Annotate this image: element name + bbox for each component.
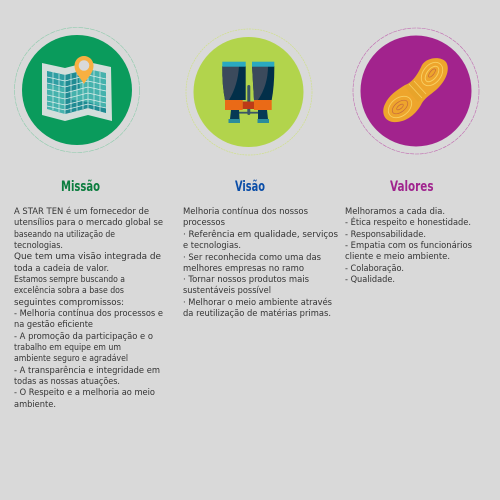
heading: Valores: Valores [390,179,434,195]
text block: Missão description: tecnologias. [14,240,63,250]
text block: Valores description: - Ética respeito e honestidade. [345,216,471,227]
text block: Valores description: - Responsabilidade. [345,229,426,239]
text block: Missão description: excelência sobra a base dos [14,285,124,295]
text block: Valores description: - Colaboração. [345,263,404,273]
panel: Valores [345,28,479,284]
text block: Valores description: cliente e meio ambiente. [345,251,450,261]
text block: Missão description: ambiente seguro e agradável [14,353,128,363]
text block: Missão description: - O Respeito e a melhoria ao meio [14,387,155,397]
text block: Visão description: melhores empresas no ramo [183,263,304,273]
panel: Visão [183,29,338,318]
icon: coiled rope on purple disc [353,28,479,154]
text block: Missão description: A STAR TEN é um fornecedor de [14,206,149,216]
text block: Missão description: trabalho em equipe em um [14,342,121,352]
text block: Missão description: utensílios para o mercado global se [14,217,163,227]
text block: Visão description: da reutilização de matérias primas. [183,308,331,318]
heading: Missão: Missão [61,179,100,195]
text block: Missão description: - A transparência e integridade em [14,365,160,375]
icon: binoculars on lime disc [186,29,312,155]
heading: Visão: Visão [235,179,265,195]
text block: Visão description [183,206,338,318]
text block: Missão description: na gestão eficiente [14,319,93,329]
text block: Visão description: · Ser reconhecida como uma das [183,252,321,262]
icon: map with location pin on green disc [14,28,140,152]
text block: Visão description: sustentáveis possível [183,285,271,295]
text block: Missão description: - Melhoria contínua dos processos e [14,308,163,318]
text block: Visão description: processos [183,217,225,227]
text block: Valores description: - Empatia com os funcionários [345,240,472,250]
text block: Missão description: Estamos sempre buscando a [14,274,125,284]
text block: Missão description: baseando na utilização de [14,229,115,239]
panel: Missão [14,28,163,409]
text block: Missão description: toda a cadeia de valor. [14,263,109,273]
text block: Visão description: · Referência em qualidade, serviços [183,229,338,239]
text block: Missão description: ambiente. [14,399,56,409]
text block: Visão description: Melhoria contínua dos nossos [183,206,308,216]
text block: Valores description [345,206,472,284]
text block: Valores description: - Qualidade. [345,274,395,284]
text block: Missão description: seguintes compromissos: [14,297,124,307]
text block: Missão description: - A promoção da participação e o [14,331,153,341]
text block: Visão description: · Tornar nossos produtos mais [183,274,309,284]
text block: Missão description: todas as nossas atuações. [14,376,120,386]
text block: Missão description: Que tem uma visão integrada de [14,251,161,261]
text block: Visão description: e tecnologias. [183,240,241,250]
text block: Valores description: Melhoramos a cada dia. [345,206,445,216]
text block: Missão description [14,206,163,409]
text block: Visão description: · Melhorar o meio ambiente através [183,297,332,307]
